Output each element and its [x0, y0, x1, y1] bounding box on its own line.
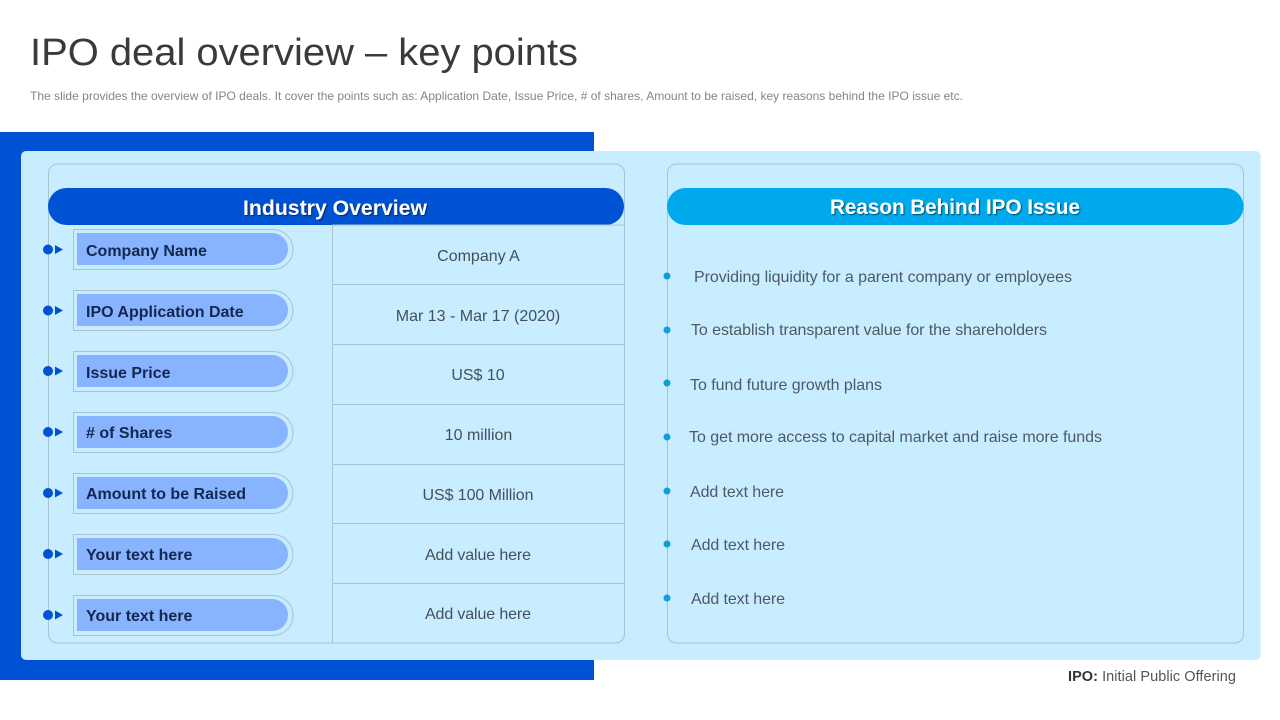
- row: your text here 2: [43, 596, 293, 636]
- bullet: transparent value: To establish transparent value for the shareholders: [691, 322, 1047, 339]
- bullet: add text 1: Add text here: [690, 484, 784, 501]
- bullet: future growth: To fund future growth plans: [690, 377, 882, 394]
- subtitle: The slide provides the overview of IPO deals. It cover the points such as: Application Date, Issue Price, # of shares, Amount to be raised, key reasons behind the IPO issue etc.: [30, 89, 963, 103]
- table of values: Add value here: [425, 606, 531, 623]
- heading: reason behind ipo issue: [667, 188, 1244, 225]
- bullet: add text 3: Add text here: [691, 591, 785, 608]
- panel: industry overview: [43, 164, 624, 643]
- panel: reason behind ipo issue: [664, 164, 1244, 643]
- row: company name: Company Name: [86, 243, 207, 260]
- bullet: providing liquidity: Providing liquidity for a parent company or employees: [694, 269, 1072, 286]
- table of values: Company A: [437, 248, 520, 265]
- title: IPO deal overview – key points: [30, 32, 578, 74]
- bullet: capital market: To get more access to capital market and raise more funds: [689, 429, 1102, 446]
- row: issue price: Issue Price: [86, 365, 171, 382]
- main light-blue panel: [21, 151, 1260, 660]
- row: number of shares: # of Shares: [86, 425, 172, 442]
- row: company name: [43, 230, 293, 270]
- table of values: 10 million: [445, 427, 512, 444]
- table of values: US$ 10: [451, 367, 505, 384]
- row: number of shares: [43, 412, 293, 452]
- row: your text here 1: [43, 534, 293, 574]
- heading: industry overview: Industry Overview: [243, 197, 428, 220]
- heading: industry overview: [48, 188, 624, 225]
- row: amount to be raised: Amount to be Raised: [86, 486, 246, 503]
- table of values: Add value here: [425, 547, 531, 564]
- table of values: US$ 100 Million: [422, 487, 534, 504]
- footnote: IPO: Initial Public Offering: [1068, 669, 1236, 685]
- heading: reason behind ipo issue: Reason Behind IPO Issue: [830, 196, 1080, 219]
- row: ipo application date: IPO Application Date: [86, 304, 244, 321]
- blue backdrop block: [0, 132, 594, 680]
- row: your text here 2: Your text here: [86, 608, 192, 625]
- row: amount to be raised: [43, 474, 293, 514]
- row: your text here 1: Your text here: [86, 547, 192, 564]
- table of values: Mar 13 - Mar 17 (2020): [396, 308, 560, 325]
- bullet: add text 2: Add text here: [691, 537, 785, 554]
- table of values: [332, 225, 624, 643]
- row: issue price: [43, 352, 293, 392]
- row: ipo application date: [43, 290, 293, 330]
